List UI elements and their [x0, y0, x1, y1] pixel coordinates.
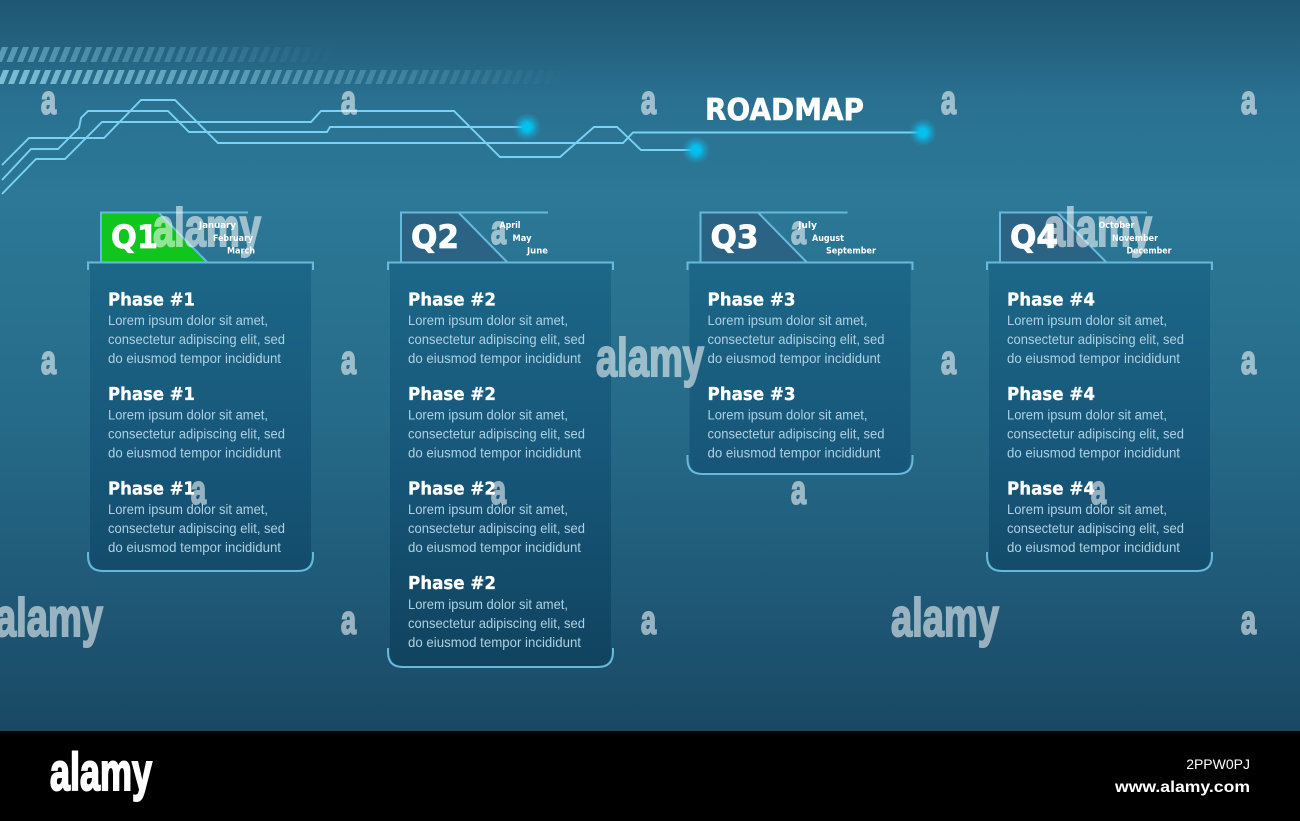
Q3 phase block 2: Phase #3	[708, 384, 796, 405]
Q1 phase block 3: consectetur adipiscing elit, sed	[108, 520, 285, 536]
watermark overlay: a	[791, 468, 807, 512]
Q2 card body	[388, 262, 613, 667]
Q4 tab: October	[1098, 221, 1135, 231]
Q3 card body	[688, 262, 912, 474]
panel: Q3	[688, 212, 912, 474]
Q1 phase block 2: Lorem ipsum dolor sit amet,	[108, 406, 268, 422]
watermark overlay: a	[41, 78, 57, 122]
Q1 tab	[101, 212, 255, 262]
watermark overlay: a	[1241, 338, 1257, 382]
Q4 phase block 2: consectetur adipiscing elit, sed	[1007, 426, 1184, 442]
footer url: www.alamy.com	[1114, 779, 1250, 796]
Q2 phase block 1: consectetur adipiscing elit, sed	[408, 331, 585, 347]
Q2 tab: May	[512, 234, 532, 244]
Q2 tab: Q2	[411, 218, 459, 256]
Q1 tab: Q1	[111, 218, 158, 256]
Q4 tab: Q4	[1010, 218, 1058, 256]
Q3 tab: August	[812, 234, 845, 244]
Q2 phase block 3: Phase #2	[408, 478, 496, 500]
watermark overlay: a	[641, 78, 657, 122]
watermark overlay: alamy	[891, 588, 999, 648]
Q4 phase block 2: do eiusmod tempor incididunt	[1007, 444, 1180, 460]
circuit lines with glowing nodes	[2, 100, 937, 194]
Q2 phase block 1: Phase #2	[408, 290, 496, 310]
Q3 phase block 1	[708, 290, 884, 366]
Q4 phase block 3: Phase #4	[1007, 478, 1095, 500]
Q2 phase block 2: consectetur adipiscing elit, sed	[408, 426, 585, 442]
watermark overlay: a	[1241, 598, 1257, 642]
Q1 phase block 3: Phase #1	[108, 478, 195, 500]
watermark overlay: a	[191, 468, 207, 512]
Q2 phase block 3: consectetur adipiscing elit, sed	[408, 520, 585, 536]
Q3 tab: Q3	[710, 218, 758, 256]
Q1 phase block 3	[108, 478, 285, 555]
Q2 phase block 2: Phase #2	[408, 384, 496, 405]
Q4 phase block 2: Lorem ipsum dolor sit amet,	[1007, 406, 1167, 422]
Q4 phase block 1: Lorem ipsum dolor sit amet,	[1007, 312, 1167, 328]
watermark overlay: a	[1241, 78, 1257, 122]
Q4 phase block 2	[1007, 384, 1184, 460]
Q2 phase block 3	[408, 478, 585, 555]
Q1 phase block 2: do eiusmod tempor incididunt	[108, 444, 281, 460]
Q4 tab: December	[1126, 246, 1172, 256]
footer logo: alamy	[50, 743, 152, 802]
Q3 tab: September	[826, 246, 876, 256]
Q1 tab: March	[227, 246, 255, 256]
watermark overlay: alamy	[1044, 198, 1152, 258]
Q2 phase block 2	[408, 384, 585, 460]
Q3 phase block 2: Lorem ipsum dolor sit amet,	[708, 406, 868, 422]
Q4 phase block 2: Phase #4	[1007, 384, 1095, 405]
Q1 phase block 1: Phase #1	[108, 290, 195, 310]
Q2 phase block 1	[408, 290, 585, 366]
Q2 phase block 4: do eiusmod tempor incididunt	[408, 634, 581, 650]
Q3 tab	[700, 212, 876, 262]
image id: 2PPW0PJ	[1186, 756, 1250, 772]
Q1 phase block 1	[108, 290, 285, 366]
Q2 phase block 4: Lorem ipsum dolor sit amet,	[408, 596, 568, 612]
Q4 phase block 3: Lorem ipsum dolor sit amet,	[1007, 501, 1167, 517]
Q4 tab	[1000, 212, 1172, 262]
watermark overlay: alamy	[596, 328, 704, 388]
watermark overlay: a	[491, 208, 507, 252]
Q4 phase block 3: consectetur adipiscing elit, sed	[1007, 520, 1184, 536]
Q4 tab: November	[1112, 234, 1158, 244]
footer bar	[0, 731, 1300, 821]
watermark overlay	[0, 78, 1257, 648]
watermark overlay: a	[641, 598, 657, 642]
Q2 phase block 4	[408, 573, 585, 650]
watermark overlay: a	[341, 338, 357, 382]
title: ROADMAP	[705, 93, 864, 128]
Q2 tab: June	[526, 246, 548, 256]
watermark overlay: a	[341, 78, 357, 122]
Q2 phase block 1: Lorem ipsum dolor sit amet,	[408, 312, 568, 328]
Q3 phase block 1: Phase #3	[708, 290, 796, 310]
Q3 phase block 2	[708, 384, 884, 460]
watermark overlay: alamy	[153, 198, 261, 258]
Q1 phase block 1: consectetur adipiscing elit, sed	[108, 331, 285, 347]
watermark overlay: a	[941, 78, 957, 122]
watermark overlay: a	[41, 338, 57, 382]
Q2 phase block 2: Lorem ipsum dolor sit amet,	[408, 406, 568, 422]
watermark overlay: a	[791, 208, 807, 252]
Q2 tab: April	[500, 221, 520, 231]
Q3 tab: July	[797, 221, 817, 231]
panel: Q4	[987, 212, 1212, 571]
Q2 tab	[401, 212, 548, 262]
Q3 phase block 1: consectetur adipiscing elit, sed	[708, 331, 884, 347]
Q2 phase block 3: Lorem ipsum dolor sit amet,	[408, 501, 568, 517]
Q3 phase block 1: do eiusmod tempor incididunt	[708, 350, 881, 366]
Q2 phase block 3: do eiusmod tempor incididunt	[408, 539, 581, 555]
Q4 card body	[987, 262, 1212, 571]
Q2 phase block 4: consectetur adipiscing elit, sed	[408, 615, 585, 631]
decorative stripe bands	[0, 47, 509, 84]
Q1 phase block 2	[108, 384, 285, 460]
Q3 phase block 2: do eiusmod tempor incididunt	[708, 444, 881, 460]
Q4 phase block 3: do eiusmod tempor incididunt	[1007, 539, 1180, 555]
Q4 phase block 1	[1007, 290, 1184, 366]
Q3 phase block 2: consectetur adipiscing elit, sed	[708, 426, 884, 442]
Q1 phase block 3: Lorem ipsum dolor sit amet,	[108, 501, 268, 517]
watermark overlay: a	[491, 468, 507, 512]
Q1 phase block 2: consectetur adipiscing elit, sed	[108, 426, 285, 442]
watermark overlay: a	[941, 338, 957, 382]
panel: Q2	[388, 212, 613, 667]
Q1 tab: January	[198, 221, 236, 231]
Q1 card body	[88, 262, 313, 571]
Q4 phase block 1: do eiusmod tempor incididunt	[1007, 350, 1180, 366]
Q1 phase block 1: do eiusmod tempor incididunt	[108, 350, 281, 366]
watermark overlay: a	[341, 598, 357, 642]
Q4 phase block 1: Phase #4	[1007, 290, 1095, 310]
Q3 phase block 1: Lorem ipsum dolor sit amet,	[708, 312, 868, 328]
Q1 tab: February	[213, 234, 253, 244]
Q4 phase block 3	[1007, 478, 1184, 555]
Q1 phase block 3: do eiusmod tempor incididunt	[108, 539, 281, 555]
Q1 phase block 1: Lorem ipsum dolor sit amet,	[108, 312, 268, 328]
Q2 phase block 1: do eiusmod tempor incididunt	[408, 350, 581, 366]
watermark overlay: a	[1091, 468, 1107, 512]
Q2 phase block 2: do eiusmod tempor incididunt	[408, 444, 581, 460]
Q2 phase block 4: Phase #2	[408, 573, 496, 594]
panel: Q1	[88, 212, 313, 571]
Q4 phase block 1: consectetur adipiscing elit, sed	[1007, 331, 1184, 347]
Q1 phase block 2: Phase #1	[108, 384, 195, 405]
